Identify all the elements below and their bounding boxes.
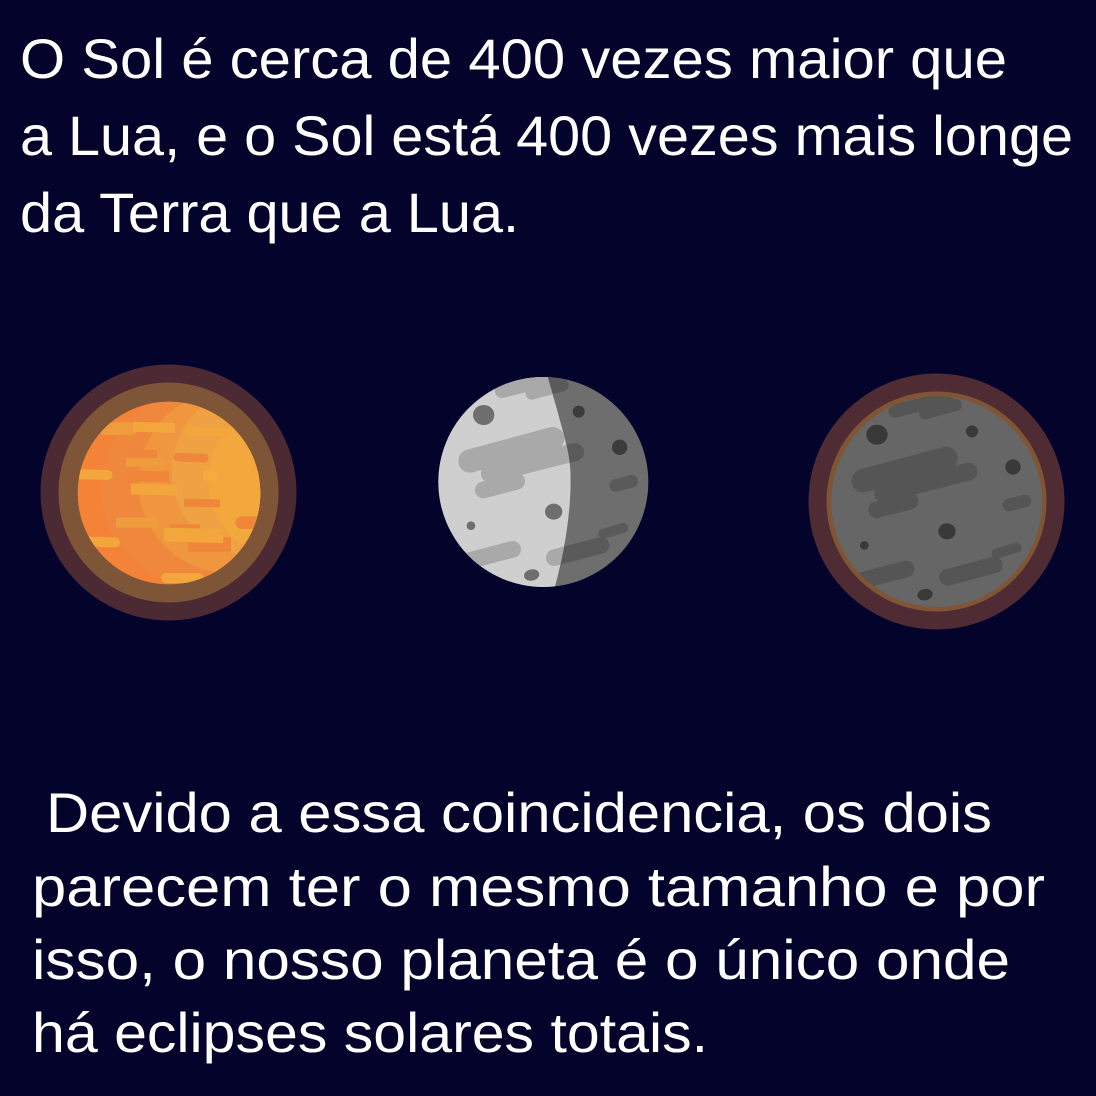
icon: sun with halo <box>40 364 296 620</box>
bottom text block: Devido a essa coincidencia, os dois <box>46 781 992 844</box>
icon: half-lit moon <box>435 375 652 592</box>
top text block: O Sol é cerca de 400 vezes maior que <box>20 27 1007 90</box>
top text block: da Terra que a Lua. <box>20 181 519 244</box>
moon shadow side <box>435 375 652 592</box>
icon: eclipse, moon covering sun <box>808 374 1064 630</box>
bottom text block <box>32 781 1045 1064</box>
bottom text block: há eclipses solares totais. <box>32 1001 708 1064</box>
top text block <box>20 27 1073 244</box>
top text block: a Lua, e o Sol está 400 vezes mais longe <box>20 104 1073 167</box>
bottom text block: parecem ter o mesmo tamanho e por <box>32 855 1045 918</box>
bottom text block: isso, o nosso planeta é o único onde <box>32 928 1010 991</box>
moon lit side <box>438 377 571 587</box>
